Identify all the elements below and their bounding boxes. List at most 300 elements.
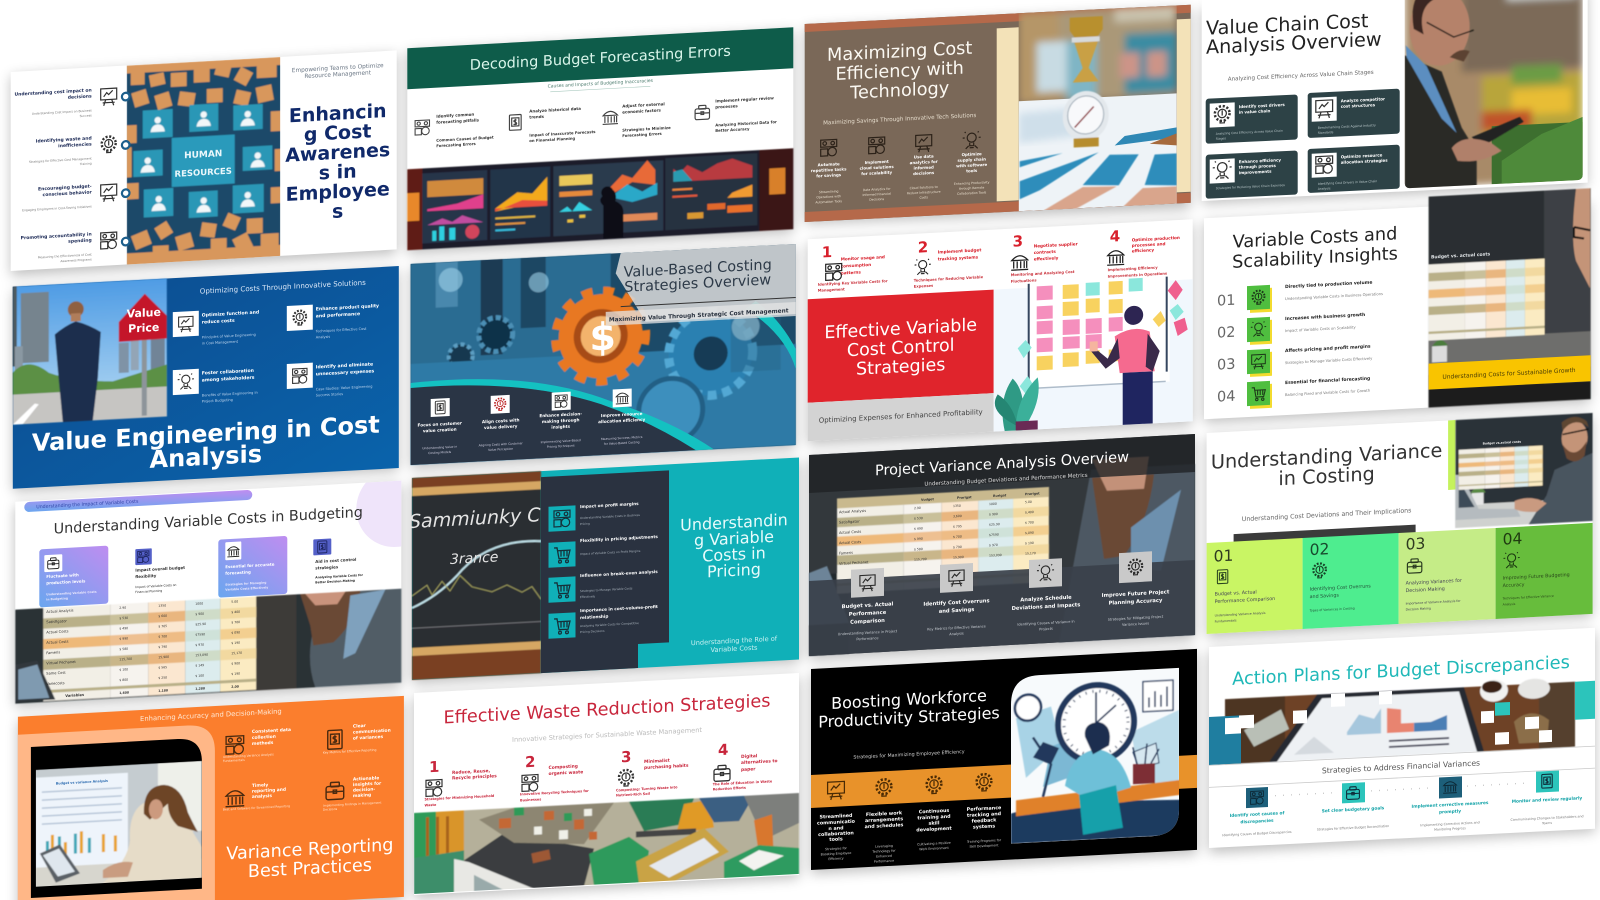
step 1: consumption [841, 262, 871, 269]
slide: Project Variance Analysis Overview [809, 434, 1195, 656]
budget table text: $25.90 [195, 622, 206, 626]
chalk writing: Sammiunky Cou [409, 503, 564, 533]
icon: gear [102, 136, 116, 153]
title: s in [319, 160, 357, 185]
photo: tablet dashboard on desk [1225, 676, 1575, 764]
table text: Actual Costs [839, 540, 861, 545]
list item 3 [548, 569, 658, 603]
step 4: 4 [1110, 227, 1120, 246]
column 1: Performance [849, 610, 887, 618]
feature 3: among stakeholders [202, 375, 255, 384]
table text: $25.90 [989, 522, 1000, 527]
table text: Satisfigator [839, 520, 860, 525]
step 4: paper [741, 766, 756, 773]
item: cost impact: Understanding Cost Impact on Business [32, 108, 92, 116]
feature 3: reporting and [252, 787, 286, 795]
item: waste: inefficiencies [58, 141, 92, 149]
quadrant 02 [1303, 533, 1399, 629]
step 1: Recycle principles [452, 773, 497, 782]
budget table text: 153,090 [195, 653, 208, 657]
column 4: tracking and [967, 811, 1002, 819]
column 3: insights [551, 424, 571, 430]
item: budget behaviour: Encouraging budget- [38, 184, 92, 192]
item 1: forecasting pitfalls [436, 117, 480, 125]
slide: Understanding Variable Costs in Budgeting [14, 480, 402, 704]
item 4: Analyzing Historical Data for [715, 119, 777, 128]
budget table text: 115,700 [119, 657, 132, 662]
subtitle: Variable Costs [711, 644, 758, 654]
photo: chalkboard with curves [412, 471, 541, 680]
budget table text: 1350 [158, 603, 166, 608]
icon: board [101, 88, 117, 106]
slide: Value Chain Cost Analysis Overview [1202, 0, 1588, 201]
quadrant 01: Fundamentals [1215, 618, 1237, 624]
budget table text: Variecosts [46, 681, 65, 686]
budget table text: Satisfigator [46, 619, 67, 624]
column 3: Use data [914, 154, 934, 160]
feature 1 [173, 308, 259, 347]
top band [805, 5, 1191, 32]
budget table text: $ 700 [231, 620, 240, 625]
step 2: organic waste [548, 769, 583, 777]
column 4 [313, 537, 363, 585]
column 1: for savings [816, 172, 842, 178]
feature 1: Fundamentals [223, 758, 245, 763]
column 2: and Savings [939, 607, 974, 615]
column 3: Cultivating a Positive [917, 841, 951, 846]
budget table text: $ 600 [158, 614, 167, 618]
step 4: alternatives to [741, 758, 777, 766]
column 2: Impact overall budget [135, 565, 185, 573]
budget table text: 5.00 [231, 600, 238, 604]
quadrant 03: Decision Making [1406, 586, 1445, 594]
column 1: Automation Tools [815, 199, 842, 204]
item 2: trends [529, 114, 545, 120]
column 3: training and [917, 814, 951, 821]
subtitle band [606, 302, 796, 326]
row 01: 01 [1217, 293, 1235, 310]
icon: clock gear [977, 774, 991, 791]
card 3: through process [1239, 163, 1277, 170]
list item 2: Flexibility in pricing adjustments [580, 534, 658, 543]
step 4: The Role of Education in Waste [713, 779, 773, 786]
step 1 [1222, 786, 1292, 837]
table text: 5.00 [1025, 500, 1032, 504]
orange band [811, 755, 1197, 808]
step 1: Waste [424, 803, 437, 807]
column 3: development [916, 826, 952, 834]
quadrant 03: Analyzing Variances for [1406, 579, 1462, 587]
title: in Costing [1278, 462, 1375, 490]
column 1: repetitive tasks [811, 166, 847, 173]
feature 3: Benefits of Value Engineering in [202, 391, 258, 398]
photo: analyst at dashboard wall [407, 148, 793, 250]
title: Value-Based Costing [624, 257, 772, 281]
column 3: informed [913, 165, 934, 171]
budget table text: $ 900 [195, 612, 204, 616]
photo: analyst with table [809, 454, 1195, 656]
step 3: 3 [621, 748, 631, 766]
budget table text: $ 900 [231, 661, 240, 666]
budget table text: $ 100 [195, 674, 204, 678]
dollar glyph: $ [589, 314, 616, 360]
footer text: Optimizing Expenses for Enhanced Profitability [819, 408, 983, 425]
quadrant 01 [1207, 538, 1303, 634]
column 2: arrangements [865, 816, 903, 824]
accent tile teal [1495, 702, 1510, 716]
budget table text: $ 149 [195, 663, 204, 668]
list item 1: Impact on profit margins [580, 501, 639, 509]
photo frame black [31, 738, 202, 898]
table text: $,400 [1025, 510, 1034, 515]
step 2: 2 [525, 753, 535, 771]
list item 3: Influence on break-even analysis [580, 569, 658, 578]
table text: Rurigat [993, 493, 1007, 498]
feature 4: Identify and eliminate [316, 362, 373, 370]
subtitle: Resource Management [304, 70, 372, 80]
item 3: Strategies to Minimize [622, 125, 671, 133]
item 4: processes [715, 103, 738, 110]
title: Variance Reporting [226, 835, 393, 864]
icon: people [101, 232, 117, 249]
title: Analysis Overview [1206, 27, 1382, 59]
step 1: Identifying Key Variable Costs for [818, 279, 888, 287]
photo heading: Budget vs variance Analysis [56, 779, 108, 786]
step 2: Techniques for Reducing Variable [914, 275, 984, 283]
title: Best Practices [248, 856, 372, 882]
feature 1 [223, 727, 291, 763]
column 4: supply chain [957, 156, 986, 163]
step 1: 1 [429, 758, 439, 776]
title: Variable Costs and [1233, 224, 1397, 253]
cream accent [997, 27, 1019, 201]
step 3: Negotiate supplier [1034, 241, 1079, 249]
row 04: Essential for financial forecasting [1285, 377, 1370, 386]
budget table text: Virtual Pechanet [46, 660, 76, 666]
table text: Actual Costs [839, 530, 861, 535]
feature 2: Techniques for Effective Cost [315, 327, 367, 334]
photo: human resources cubes [127, 57, 281, 266]
icon: money [415, 120, 430, 135]
step 4: Monitor and review regularly [1512, 796, 1582, 805]
column 2: Analysis [949, 632, 964, 636]
column 4: with software [956, 162, 988, 168]
step 3: 3 [1013, 232, 1023, 251]
feature 4 [287, 359, 375, 399]
table text: $ 190 [1025, 541, 1034, 545]
feature 2: Analysis [316, 335, 330, 339]
step 4: Reduction Efforts [713, 786, 746, 791]
column 2: Informed Financial [862, 192, 891, 197]
item: waste: Identifying waste and [36, 136, 92, 145]
feature 4: decision- [353, 786, 375, 794]
table text: $ 900 [989, 512, 998, 516]
list item 4 [548, 604, 658, 639]
tile 2 [940, 563, 973, 593]
photo: hourglass over chart [1019, 5, 1177, 212]
column 1: Boosting Employee [821, 851, 851, 856]
column 4: Skill Development [970, 843, 999, 849]
step 4: processes and [1132, 241, 1166, 248]
column 1: Costing Models [428, 450, 452, 455]
budget table text: $ 790 [158, 645, 167, 649]
row 01 [1217, 279, 1383, 315]
budget table text: 1000 [195, 601, 203, 606]
table text: $ 795 [953, 524, 962, 529]
quadrant 02: and Savings [1310, 593, 1339, 600]
title: Productivity Strategies [818, 703, 1000, 732]
table text: 3,600 [953, 514, 962, 518]
photo: woman reviewing budget [31, 761, 202, 888]
column 3: Identifying Causes of Variance in [1017, 620, 1075, 627]
column 4: through Remote [959, 186, 984, 191]
list item 4: relationship [580, 614, 608, 620]
table text: $ 990 [914, 537, 923, 541]
feature 1: in Cost Management [202, 340, 239, 346]
subtitle: Understanding Cost Deviations and Their Implications [1242, 507, 1411, 523]
title: Costs in [702, 543, 766, 566]
subtitle: Analyzing Cost Efficiency Across Value Chain Stages [1228, 70, 1374, 83]
list item 3: Effectively [580, 594, 595, 599]
card 1 highlighted: Understanding Variable Costs [46, 590, 97, 597]
list item 4: Pricing Decisions [580, 629, 605, 634]
column 4: for Value-Based Costing [604, 440, 640, 446]
list item 1 [548, 501, 640, 532]
list item 4: Importance in cost-volume-profit [580, 604, 658, 613]
list item 2: Impact of Variable Costs on Profit Margins [580, 549, 641, 556]
column 3: Reduce Infrastructure [907, 190, 941, 195]
quadrant 03: Importance of Variance Analysis for [1406, 599, 1461, 606]
feature 4: Actionable [353, 776, 379, 783]
budget table text: $ 250 [158, 676, 167, 680]
subtitle: Maximizing Value Through Strategic Cost Management [609, 308, 789, 324]
icon: presentation [101, 184, 117, 202]
step 2: Composting [548, 763, 578, 771]
slide: Action Plans for Budget Discrepancies [1209, 628, 1595, 848]
title: Project Variance Analysis Overview [875, 450, 1129, 479]
feature 4: Decisions [323, 807, 338, 812]
column 3: Costs [919, 195, 928, 200]
column 4: feedback [972, 817, 997, 825]
feature 3 [223, 781, 290, 812]
column 4: Optimize [962, 151, 982, 157]
quadrant 04 [1496, 523, 1593, 619]
illustration: planning board with sticky notes [994, 275, 1193, 432]
title: Analysis [150, 440, 262, 474]
budget table text: Actual Analysis [46, 609, 73, 614]
column 4: Planning Accuracy [1109, 598, 1163, 607]
card 3 highlighted: forecasting [225, 569, 251, 576]
row 01: Understanding Variable Costs in Business Operations [1285, 292, 1383, 301]
feature 4: unnecessary expenses [316, 368, 375, 377]
quadrant 04: Techniques for Effective Variance [1502, 594, 1554, 601]
column 3: Pricing Techniques [547, 443, 575, 449]
icon tile 4 [613, 389, 632, 407]
step 3: promptly [1439, 808, 1461, 815]
card 1 highlighted: Fluctuate with [46, 572, 79, 579]
list item 1: Pricing [580, 522, 590, 526]
feature 4: Case Studies: Value Engineering [316, 384, 372, 391]
top pill [24, 490, 252, 512]
photo caption: HUMAN RESOURCES: HUMAN [184, 149, 222, 161]
column 1: Understanding Variance in Project [838, 629, 898, 636]
table text: $ 790 [953, 545, 962, 549]
subtitle: Understanding the Role of [691, 635, 777, 647]
subtitle: Understanding Budget Deviations and Performance Metrics [924, 473, 1088, 488]
table text: $ 530 [914, 516, 923, 521]
step 4 [1510, 769, 1584, 827]
table text: Prarigot [1025, 491, 1040, 496]
budget table text: $ 530 [119, 616, 128, 620]
budget table text: $ 970 [195, 643, 204, 647]
table text: $,090 [1025, 531, 1034, 535]
budget table text: $ 580 [119, 647, 128, 651]
quadrant 02: Identifying Cost Overruns [1310, 584, 1371, 593]
subtitle: Maximizing Savings Through Innovative Tech Solutions [823, 113, 976, 127]
column 1: Strategies for [825, 846, 848, 851]
table text [839, 491, 1040, 566]
step 2 [1317, 781, 1389, 832]
column 1: Budget vs. Actual [842, 601, 893, 610]
title: Scalability Insights [1232, 244, 1398, 273]
budget table text: Actual Costs [46, 640, 69, 645]
icon: bulb [915, 259, 931, 275]
step 3: Implement corrective measures [1412, 801, 1488, 810]
column 4: Aid in cost control [315, 557, 356, 564]
photo accent tiles [1239, 683, 1552, 758]
column 4: systems [973, 823, 995, 831]
icon: bag [714, 765, 730, 781]
table text: 1350 [953, 504, 961, 508]
column 3: skill [929, 820, 940, 827]
feature 2 [287, 301, 379, 341]
budget table text: $ 800 [119, 678, 128, 682]
item 4: Better Accuracy [715, 126, 750, 133]
step 4: Digital [741, 753, 758, 760]
budget table text: 2,00 [231, 685, 239, 689]
title: Enhancin [289, 100, 387, 127]
title: Cost Control [847, 336, 955, 361]
budget table text: $ 090 [231, 630, 240, 635]
table text: 2.90 [914, 506, 921, 510]
table text: Prarigat [957, 495, 972, 500]
feature 2: of variances [353, 734, 383, 742]
tile 4 [1119, 551, 1152, 583]
feature 2 [323, 722, 391, 755]
dark bar [1234, 525, 1416, 542]
quadrant 04: Analysis [1503, 602, 1516, 607]
step 4: efficiency [1132, 247, 1154, 253]
slide: Variable Costs and Scalability Insights [1204, 188, 1591, 419]
budget table text: Actual Costs [46, 629, 69, 635]
chalk word: 3rance [450, 549, 498, 568]
column 4: Improve Future Project [1102, 589, 1169, 599]
icon: bank [1011, 255, 1028, 270]
column 3: Implementing Value-Based [541, 438, 581, 444]
budget table text: $ 990 [119, 636, 128, 641]
column 3: Cloud Solutions to [910, 185, 938, 190]
item: cost impact: Understanding cost impact on [14, 88, 92, 98]
column 1: Operations with [816, 194, 841, 199]
slide: Decoding Budget Forecasting Errors [407, 27, 793, 250]
card 4: Optimize resource [1341, 152, 1382, 159]
connector dots [1275, 783, 1531, 796]
card 1: Analyzing Cost Efficiency Across Value Chain [1216, 129, 1283, 136]
subtitle: Enhancing Accuracy and Decision-Making [140, 707, 282, 723]
step 4: Optimize production [1132, 235, 1180, 242]
step 1: Reduce, Reuse, [452, 768, 490, 776]
feature 3: Best and Software for Streamlined Reporting [223, 804, 290, 812]
yellow banner [1429, 355, 1591, 390]
card 2: Benchmarking Costs Against Industry [1318, 123, 1376, 130]
column 4: Variance Issues [1122, 621, 1149, 627]
subtitle: Empowering Teams to Optimize [292, 63, 384, 74]
column 4: Better Decision-Making [315, 578, 355, 585]
slide: Understanding Variable Costs in Pricing [409, 457, 799, 680]
column 1: communicatio [817, 819, 856, 827]
budget table text: $ 565 [158, 665, 167, 670]
step 2: Set clear budgetary goals [1322, 806, 1384, 814]
title: Action Plans for Budget Discrepancies [1232, 652, 1570, 690]
column 4: Performance [967, 806, 1001, 813]
table text: Fameris [839, 551, 853, 556]
feature 1: collection [252, 734, 276, 741]
title: Boosting Workforce [831, 686, 987, 713]
item 3: Adjust for external [622, 101, 665, 109]
column 2: Technology for [871, 849, 896, 854]
list item 1: Understanding Variable Costs in Business [580, 513, 640, 520]
footer panel [808, 393, 994, 441]
teal block left [1209, 715, 1241, 765]
card 1 highlighted [39, 546, 108, 607]
lime accent [1448, 420, 1456, 490]
feature 3: Foster collaboration [202, 369, 254, 377]
step 3: contracts [1034, 249, 1056, 255]
step 3: Implementing Corrective Actions and [1420, 820, 1480, 827]
column 4: Measuring Success: Metrics [601, 435, 643, 441]
icon: globe money [826, 264, 842, 281]
column 4: Improve resource [601, 411, 642, 418]
column 2: Identify Cost Overruns [923, 598, 990, 608]
title: s [332, 200, 343, 223]
step 4: Improvements in Operations [1108, 272, 1168, 279]
list item 4: Analyzing Variable Costs for Competitive [580, 621, 639, 628]
title: Value Engineering in Cost [32, 411, 380, 457]
step 1: Management [818, 287, 845, 293]
quadrant 01: Performance Comparison [1215, 596, 1275, 605]
feature 2: Key Metrics for Effective Reporting [323, 748, 376, 755]
icon: supply chain [963, 131, 981, 149]
title: Decoding Budget Forecasting Errors [470, 44, 731, 74]
column 1: value creation [423, 427, 457, 433]
row 01: Directly tied to production volume [1285, 281, 1372, 290]
column 2: Data Analytics for [863, 187, 891, 192]
column 2: Implement [865, 159, 889, 165]
step 1: patterns [841, 270, 861, 276]
budget table text: $ 100 [119, 667, 128, 672]
column 4: Analyzing Variable Costs for [315, 573, 363, 580]
row 02: Impact of Variable Costs on Scalability [1285, 325, 1357, 333]
column 1: Automate [818, 161, 840, 167]
card 1 highlighted: in Budgeting [46, 596, 68, 602]
column 2: value delivery [484, 423, 518, 430]
budget table text: 15,170 [231, 651, 242, 655]
column 2: flexibility [135, 573, 157, 579]
item 2: on Financial Planning [529, 136, 576, 143]
card 4: allocation strategies [1341, 158, 1388, 165]
slide: Boosting Workforce Productivity Strategies [811, 649, 1197, 870]
column 2: Flexible work [866, 811, 902, 818]
